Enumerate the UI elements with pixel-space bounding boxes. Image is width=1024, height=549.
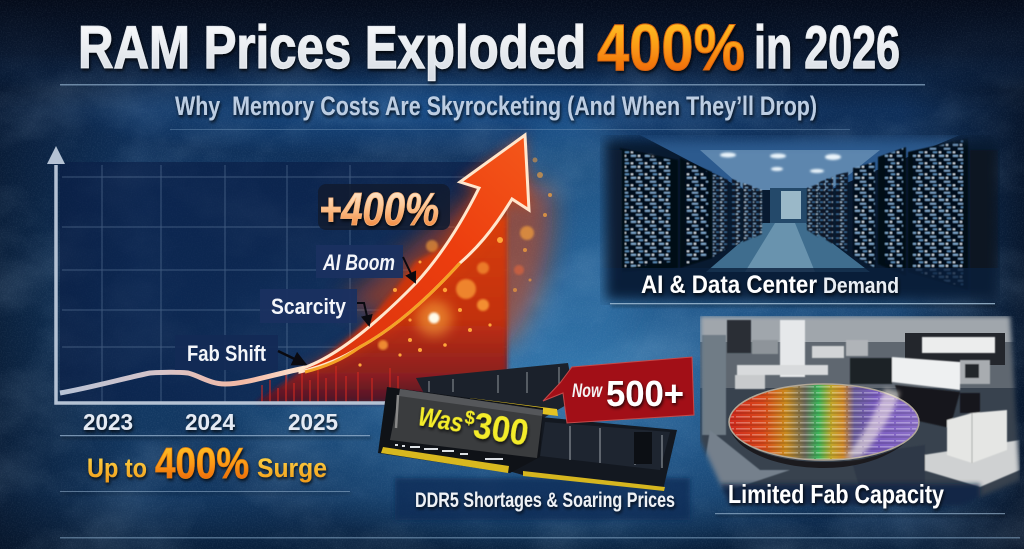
- axes: [47, 146, 392, 403]
- surge callout: 400%: [155, 439, 249, 488]
- surge callout: Up to: [87, 453, 147, 483]
- price tag: [543, 357, 694, 423]
- callout: Fab Shift: Fab Shift: [187, 341, 267, 366]
- callout: AI Boom: [316, 245, 415, 282]
- year labels: 2025: [288, 409, 338, 435]
- year labels: [83, 409, 338, 435]
- callout: Fab Shift: [175, 335, 305, 370]
- callout: AI Boom: AI Boom: [322, 250, 395, 275]
- price tag: Now: [572, 381, 603, 402]
- panel: DDR5 modules: [378, 357, 694, 520]
- back door: [770, 188, 808, 223]
- bottom fade: [720, 484, 980, 508]
- right racks: [620, 138, 996, 286]
- panel: price chart: [47, 135, 552, 435]
- caption: fab: Limited Fab Capacity: [728, 479, 944, 509]
- grid lines: [62, 165, 507, 403]
- front module: Was: [416, 401, 465, 438]
- title: [78, 10, 900, 84]
- front module: $: [463, 407, 476, 429]
- front module: [378, 387, 543, 473]
- callout: Scarcity: Scarcity: [271, 294, 347, 319]
- front module: 300: [471, 404, 531, 454]
- panel: data center photo: [600, 135, 1000, 305]
- caption: data center: AI & Data Center: [641, 271, 817, 299]
- callout: +400%: +400%: [319, 183, 439, 235]
- title: in 2026: [754, 14, 900, 81]
- caption: DDR5 Shortages & Soaring Prices: [415, 489, 675, 512]
- right module: [505, 415, 677, 491]
- left racks: [620, 148, 762, 272]
- year labels: 2024: [185, 409, 235, 435]
- silicon wafer: [729, 384, 919, 468]
- bottom fade: [614, 268, 998, 300]
- callout: Scarcity: [260, 289, 369, 325]
- price tag: 500+: [606, 373, 684, 414]
- ceiling: [640, 135, 960, 190]
- title: 400%: [597, 10, 745, 84]
- price line: [60, 368, 305, 393]
- sparks: [358, 158, 552, 367]
- equipment: [700, 320, 1020, 490]
- year labels: 2023: [83, 409, 133, 435]
- subtitle: Why Memory Costs Are Skyrocketing (And When They’ll Drop): [175, 91, 817, 121]
- caption: data center: [610, 271, 995, 304]
- title: RAM Prices Exploded: [78, 14, 586, 81]
- back module: [416, 363, 575, 420]
- caption: data center: Demand: [823, 273, 899, 298]
- red glow area: [255, 170, 552, 403]
- panel: fab photo: [700, 316, 1020, 508]
- caption band: [395, 478, 690, 520]
- surge callout: Surge: [257, 453, 327, 483]
- back wall: [700, 316, 1020, 342]
- rising arrow: [300, 135, 529, 372]
- floor: [706, 223, 870, 272]
- surge callout: [60, 435, 370, 492]
